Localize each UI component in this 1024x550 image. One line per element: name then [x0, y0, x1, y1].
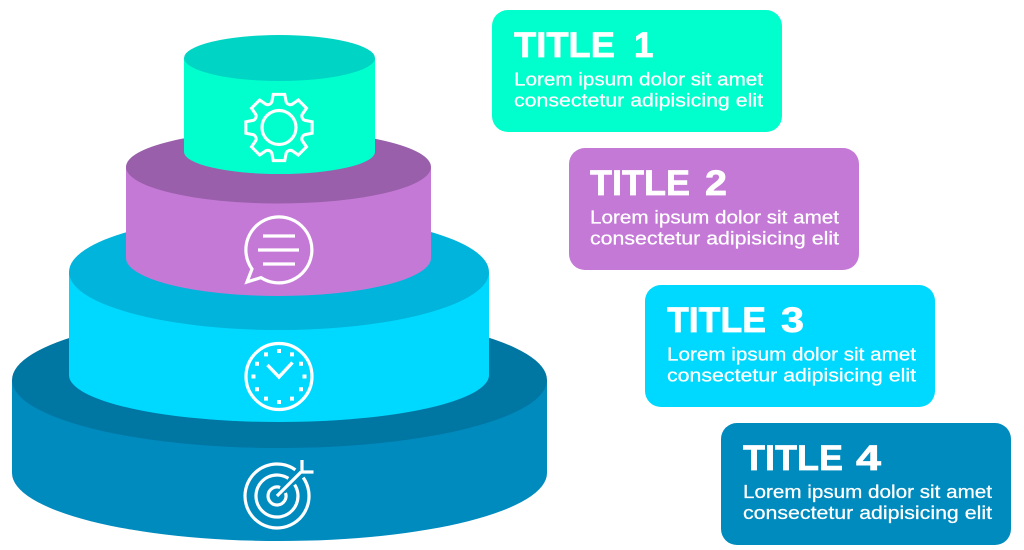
card: title 1 — [492, 10, 782, 132]
tier 3 cylinder — [69, 214, 489, 422]
icon: target — [245, 460, 314, 528]
card: title 2: Lorem ipsum dolor sit amet — [590, 206, 839, 228]
card: title 1: TITLE — [514, 26, 615, 65]
icon: speech bubble — [246, 217, 312, 283]
card: title 3: 3 — [781, 301, 804, 340]
icon: gear — [246, 94, 312, 161]
card: title 2 — [569, 148, 859, 270]
card: title 1: Lorem ipsum dolor sit amet — [514, 68, 763, 90]
card: title 4: TITLE — [743, 439, 843, 478]
tier 4 cylinder — [12, 312, 547, 541]
card: title 1: 1 — [634, 26, 653, 65]
card: title 3: consectetur adipisicing elit — [667, 364, 916, 386]
card: title 2: TITLE — [590, 164, 690, 203]
card: title 3: TITLE — [667, 301, 766, 340]
tier 2 cylinder — [126, 130, 431, 296]
tier 1 cylinder — [184, 35, 375, 174]
card: title 3 — [645, 285, 935, 407]
card: title 4: 4 — [856, 439, 882, 478]
icon: clock — [246, 344, 312, 410]
card: title 2: consectetur adipisicing elit — [590, 228, 839, 248]
card: title 4: consectetur adipisicing elit — [743, 502, 992, 523]
card: title 1: consectetur adipisicing elit — [514, 90, 763, 110]
card: title 2: 2 — [705, 164, 727, 203]
card: title 4 — [721, 423, 1011, 545]
card: title 3: Lorem ipsum dolor sit amet — [667, 344, 916, 364]
card: title 4: Lorem ipsum dolor sit amet — [743, 481, 992, 502]
